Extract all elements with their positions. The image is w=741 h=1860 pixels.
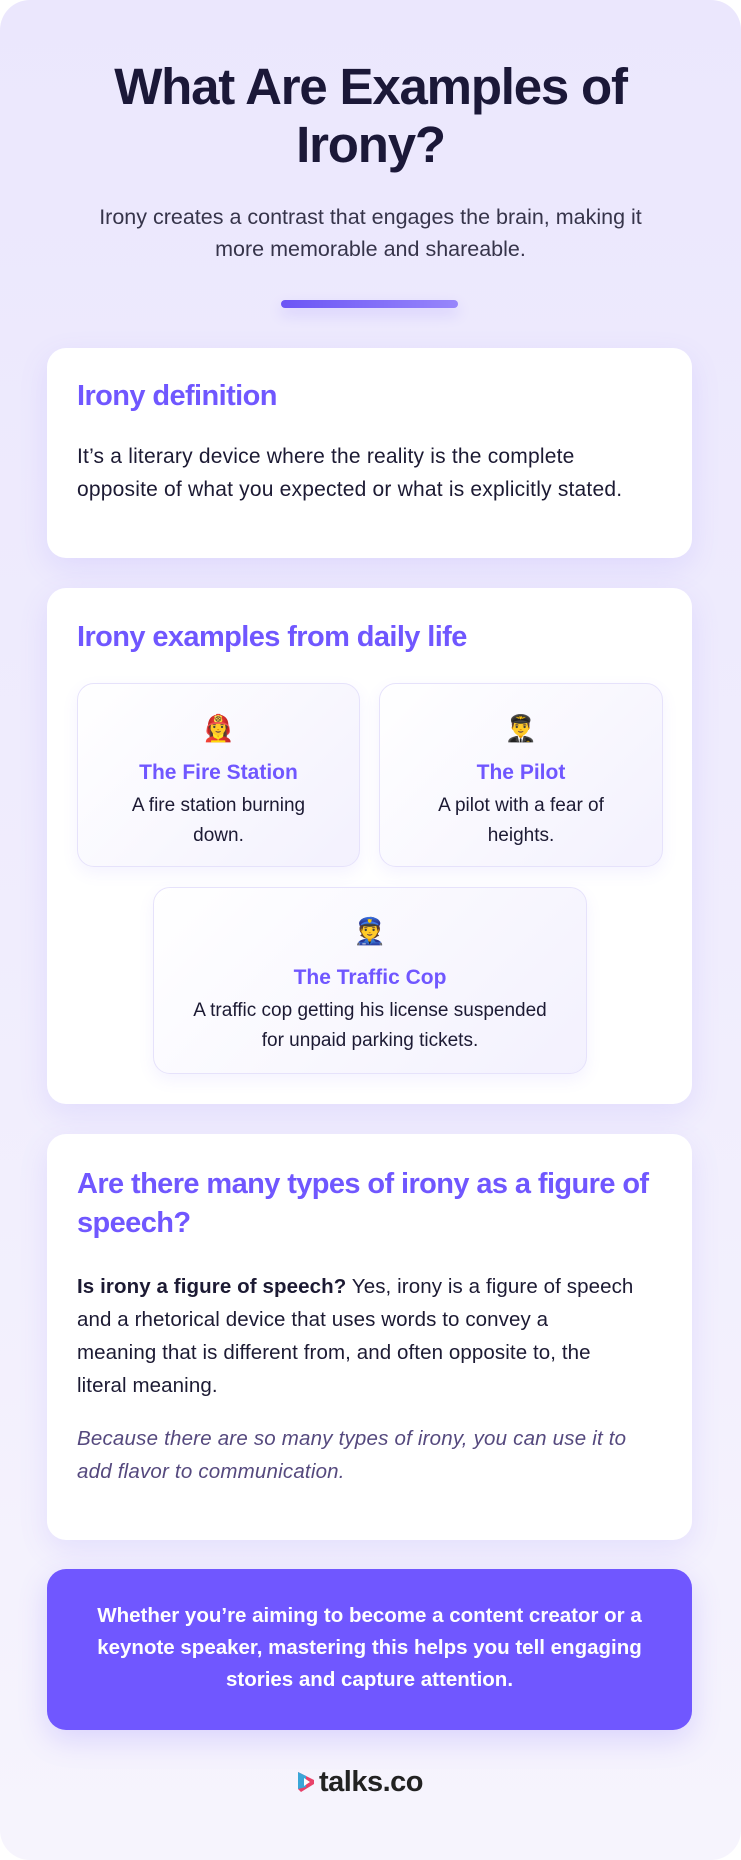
- callout: CTA: [47, 1569, 692, 1730]
- card text: A fire station burning: [132, 795, 305, 816]
- text: figure of speech: Is irony a figure of speech? Yes, irony is a figure of speech: [77, 1275, 633, 1298]
- callout: CTA: keynote speaker, mastering this helps you tell engaging: [97, 1636, 642, 1659]
- text: figure of speech: meaning that is different from, and often opposite to, the: [77, 1341, 591, 1364]
- card title: The Pilot: [477, 761, 565, 784]
- card text: [193, 1000, 547, 1051]
- subtitle: [99, 205, 642, 261]
- text: figure of speech: literal meaning.: [77, 1374, 218, 1397]
- panel: examples from daily life: [47, 588, 692, 1104]
- text: italic note: Because there are so many types of irony, you can use it to: [77, 1427, 626, 1450]
- card text: for unpaid parking tickets.: [262, 1030, 478, 1051]
- heading: examples: Irony examples from daily life: [77, 621, 467, 653]
- icon: police officer: 👮: [354, 916, 386, 946]
- card: traffic cop: [153, 887, 587, 1074]
- callout: CTA: Whether you’re aiming to become a content creator or a: [97, 1604, 642, 1627]
- card text: A pilot with a fear of: [438, 795, 604, 816]
- card text: [132, 795, 305, 846]
- heading: types: Are there many types of irony as a figure of: [77, 1168, 648, 1200]
- heading: types: [77, 1168, 650, 1239]
- callout: CTA: stories and capture attention.: [226, 1668, 513, 1691]
- card text: [438, 795, 604, 846]
- card text: down.: [193, 825, 244, 846]
- subtitle: Irony creates a contrast that engages the brain, making it: [99, 205, 642, 229]
- title: Irony?: [296, 116, 445, 173]
- text: definition: It’s a literary device where the reality is the complete: [77, 445, 575, 468]
- card title: The Traffic Cop: [294, 966, 446, 989]
- title: [114, 58, 628, 173]
- heading: types: speech?: [77, 1207, 190, 1239]
- card title: The Fire Station: [139, 761, 298, 784]
- text: definition: [77, 445, 622, 501]
- card: pilot: [379, 683, 663, 867]
- text: italic note: add flavor to communication.: [77, 1460, 345, 1483]
- title: What Are Examples of: [114, 58, 627, 115]
- icon: pilot: 👨‍✈️: [505, 713, 537, 743]
- logo: talks.co: talks.co: [319, 1766, 423, 1798]
- card text: heights.: [488, 825, 554, 846]
- text: italic note: [77, 1427, 626, 1483]
- text: definition: opposite of what you expected or what is explicitly stated.: [77, 478, 622, 501]
- card: fire station: [77, 683, 360, 867]
- text: figure of speech: and a rhetorical device that uses words to convey a: [77, 1308, 548, 1331]
- divider bar: [281, 300, 458, 308]
- heading: irony definition: Irony definition: [77, 380, 277, 412]
- text: figure of speech: [77, 1275, 633, 1397]
- icon: logo mark: [298, 1772, 314, 1792]
- icon: firefighter: 👩‍🚒: [202, 713, 235, 743]
- panel: types of irony: [47, 1134, 692, 1540]
- card text: A traffic cop getting his license suspended: [193, 1000, 547, 1021]
- panel: irony definition: [47, 348, 692, 558]
- subtitle: more memorable and shareable.: [215, 237, 526, 261]
